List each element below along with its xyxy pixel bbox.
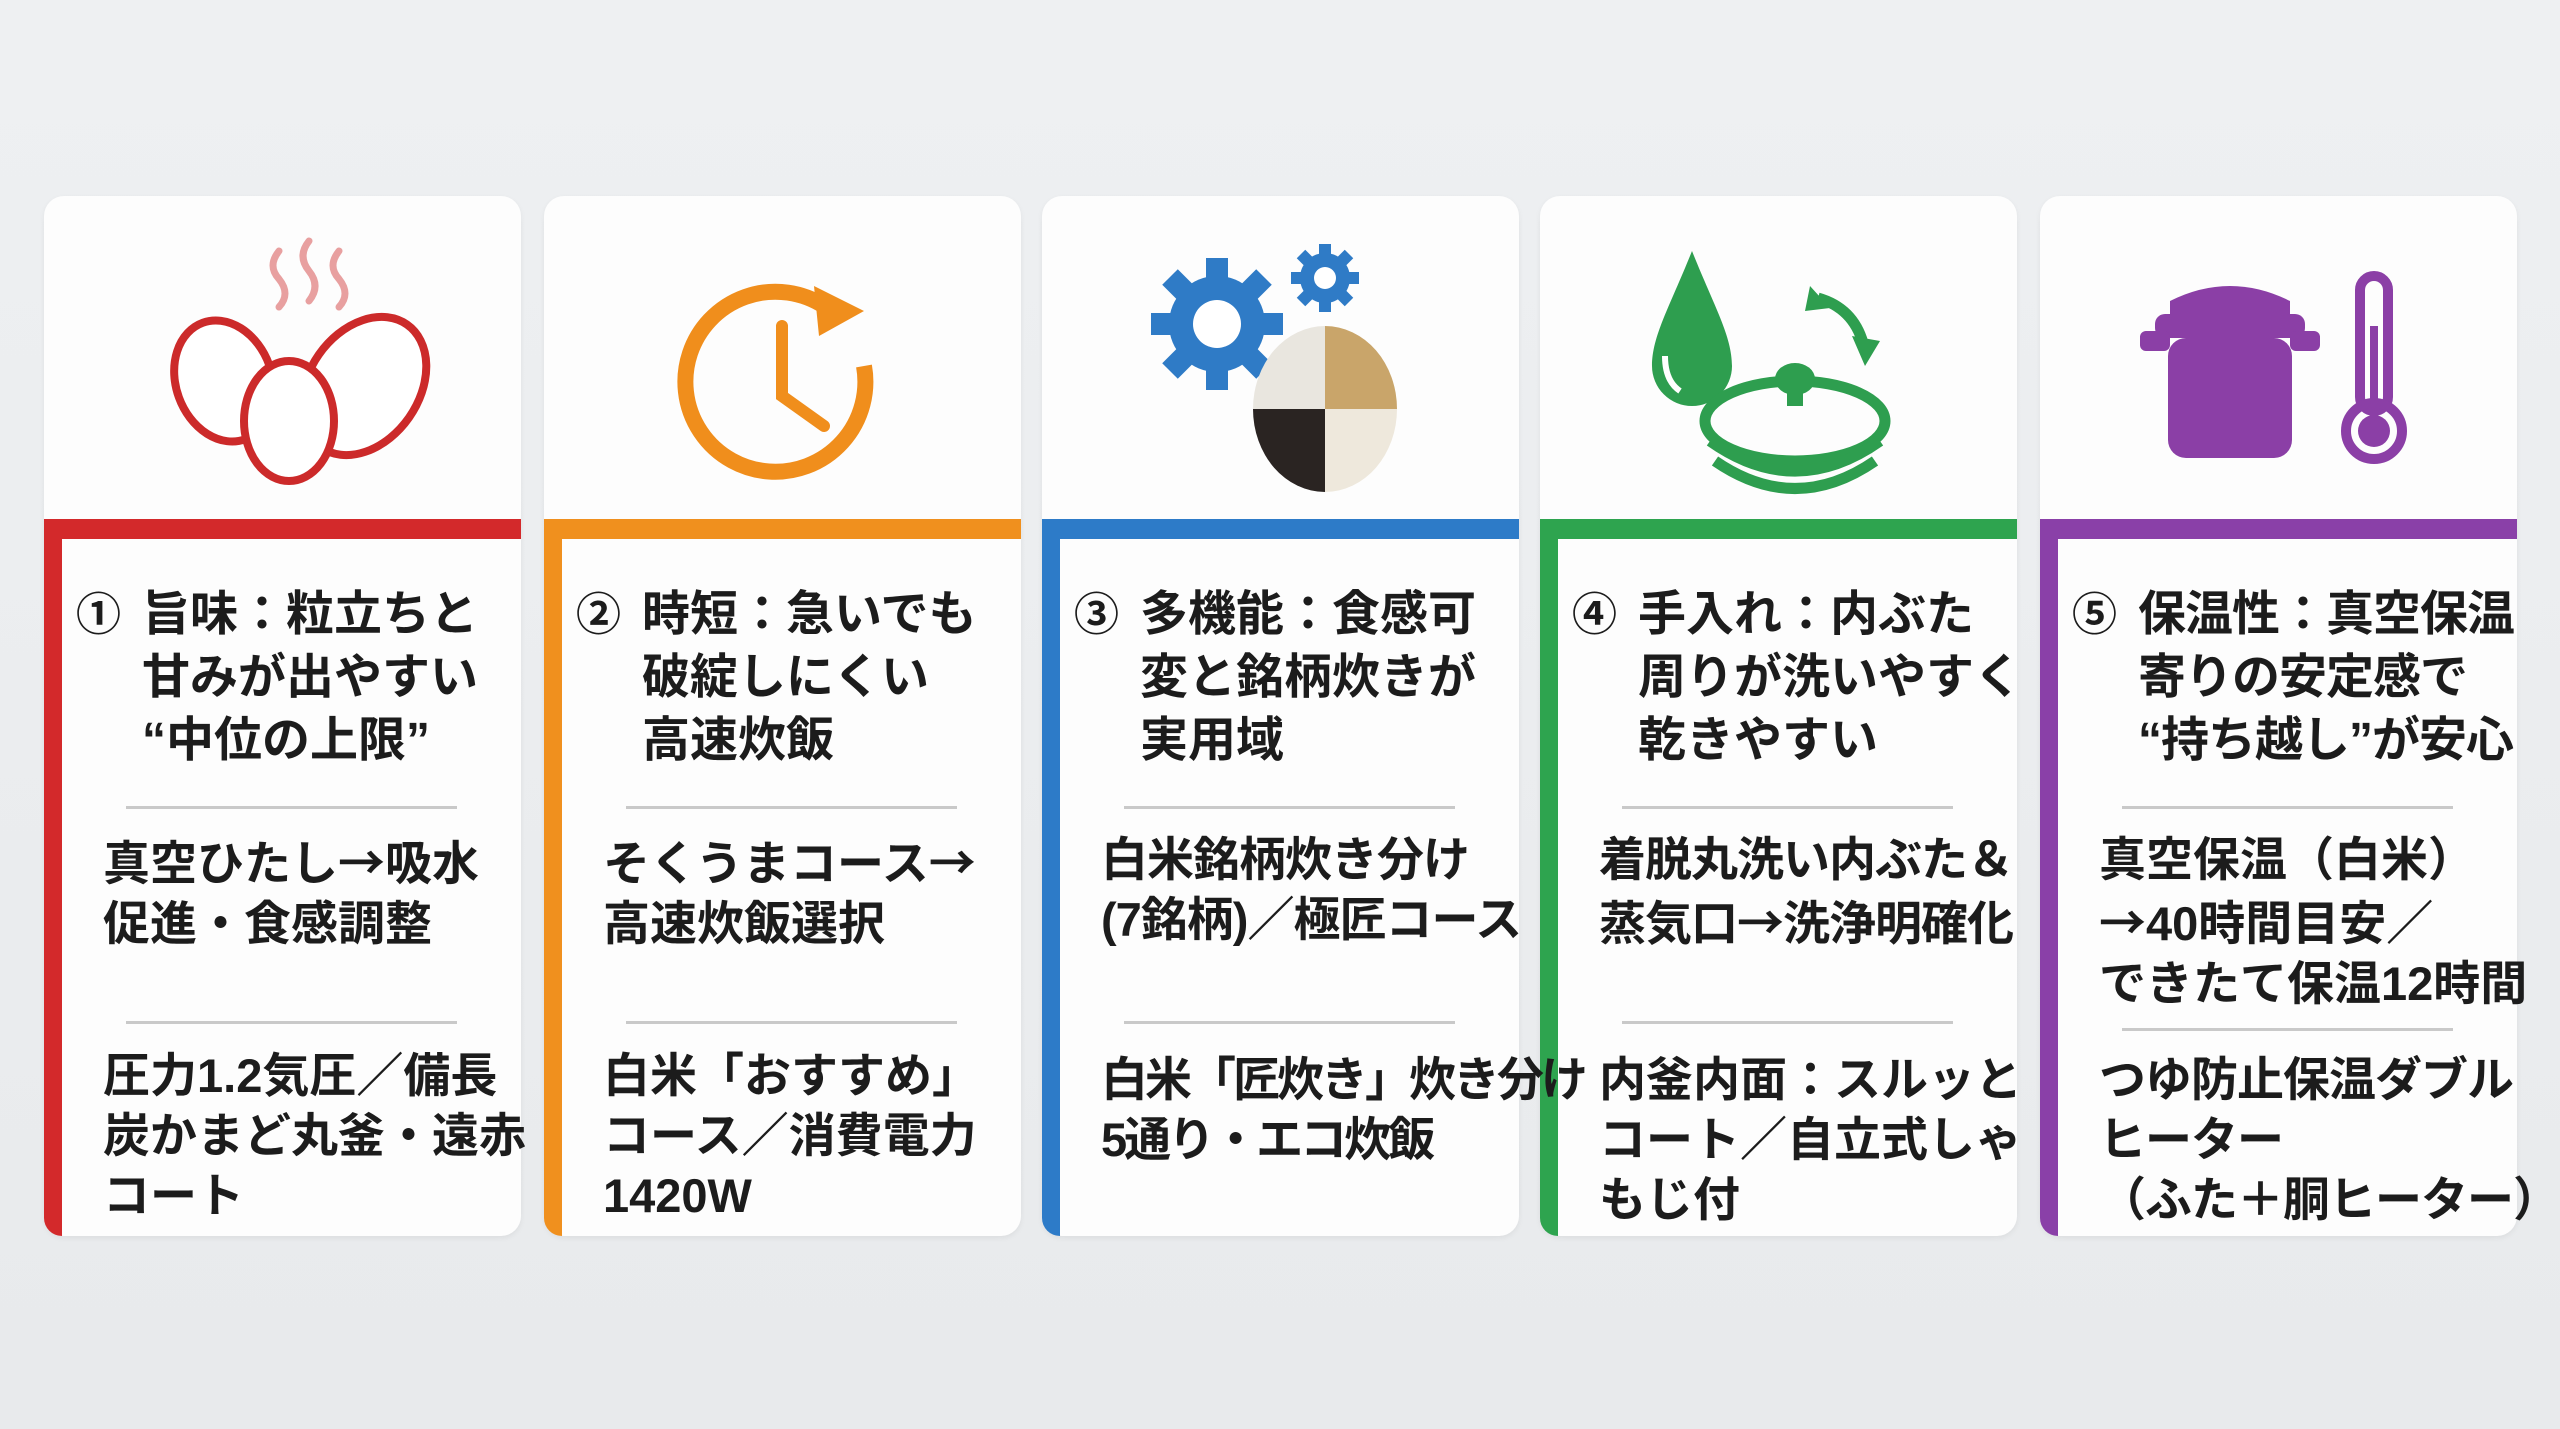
title: 甘みが出やすい — [142, 651, 478, 704]
card 5: heat retention: ⑤ — [2072, 589, 2116, 640]
card 3: multi-function: ③ — [1074, 589, 1119, 640]
body 1: 蒸気口→洗浄明確化 — [1599, 885, 2013, 954]
card 1: taste — [44, 196, 521, 1236]
body 1: できたて保温12時間 — [2099, 957, 2527, 1010]
title — [1074, 588, 1476, 767]
title: 乾きやすい — [1638, 714, 1878, 767]
body 2: 5通り・エコ炊飯 — [1101, 1113, 1432, 1166]
card 2: speed: ② — [576, 589, 621, 640]
title: “中位の上限” — [142, 714, 430, 767]
body 2: 内釜内面：スルッと — [1599, 1053, 2022, 1106]
body 1: そくうまコース→ — [603, 825, 976, 894]
card 4: care — [1540, 196, 2017, 1236]
body 2 — [603, 1049, 979, 1222]
title: 実用域 — [1140, 714, 1284, 767]
title: 多機能：食感可 — [1140, 588, 1476, 641]
body 2: つゆ防止保温ダブル — [2099, 1053, 2513, 1106]
body 1 — [603, 825, 976, 950]
body 2 — [2099, 1053, 2559, 1226]
title: 保温性：真空保温 — [2138, 588, 2514, 641]
title — [76, 588, 478, 767]
body 2 — [1101, 1053, 1585, 1166]
card 1: taste: ① — [76, 589, 121, 640]
title: 高速炊飯 — [642, 714, 834, 767]
body 1 — [1599, 833, 2013, 954]
title — [2072, 588, 2514, 767]
card 5: heat retention — [2040, 196, 2517, 1236]
title: 手入れ：内ぶた — [1638, 588, 1974, 641]
body 2: コート／自立式しゃ — [1599, 1113, 2022, 1166]
body 2: 1420W — [603, 1169, 752, 1222]
body 2 — [1599, 1053, 2022, 1226]
body 2: 炭かまど丸釜・遠赤 — [103, 1109, 526, 1162]
body 1 — [1101, 833, 1521, 946]
icon: rice grains with steam — [170, 238, 430, 485]
body 2: もじ付 — [1599, 1173, 1740, 1226]
body 1: 真空ひたし→吸水 — [103, 825, 479, 894]
icon: water drop and lid — [1652, 251, 1890, 494]
body 1: 真空保温（白米） — [2099, 833, 2475, 886]
body 2: （ふた＋胴ヒーター） — [2099, 1173, 2559, 1226]
body 2: 白米「匠炊き」炊き分け — [1101, 1053, 1585, 1106]
body 1: 促進・食感調整 — [103, 897, 432, 950]
title: 変と銘柄炊きが — [1140, 651, 1476, 704]
title: 周りが洗いやすく — [1638, 651, 2022, 704]
body 1: →40時間目安／ — [2099, 885, 2433, 954]
title: 旨味：粒立ちと — [142, 588, 478, 641]
title: 破綻しにくい — [642, 651, 929, 704]
body 2: コート — [103, 1169, 244, 1222]
body 2: コース／消費電力 — [603, 1109, 977, 1162]
body 1: 白米銘柄炊き分け — [1101, 833, 1469, 886]
body 1: 着脱丸洗い内ぶた＆ — [1599, 833, 2013, 886]
body 1 — [2099, 833, 2527, 1010]
title — [576, 588, 977, 767]
icon: gears and rice mix — [1151, 244, 1397, 492]
title — [1572, 588, 2022, 767]
card 3: multi-function — [1042, 196, 1519, 1236]
body 2: ヒーター — [2099, 1113, 2283, 1166]
icon: rice cooker and thermometer — [2140, 271, 2407, 464]
body 1 — [103, 825, 479, 950]
body 2: 圧力1.2気圧／備長 — [103, 1049, 497, 1102]
card 4: care: ④ — [1572, 589, 1617, 640]
body 2: 白米「おすすめ」 — [603, 1049, 979, 1102]
title: “持ち越し”が安心 — [2138, 714, 2513, 767]
body 1: (7銘柄)／極匠コース — [1101, 893, 1521, 946]
title: 寄りの安定感で — [2138, 651, 2467, 704]
body 1: 高速炊飯選択 — [603, 897, 885, 950]
title: 時短：急いでも — [642, 588, 977, 641]
body 2 — [103, 1049, 526, 1222]
icon: clock — [677, 284, 874, 480]
card 2: speed — [544, 196, 1021, 1236]
